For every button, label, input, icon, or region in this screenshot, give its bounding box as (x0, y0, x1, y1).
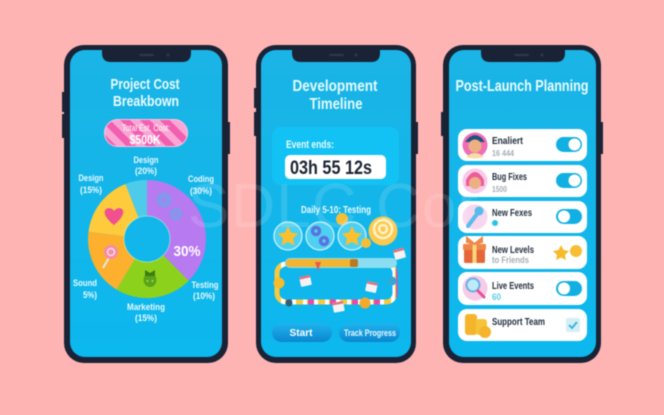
start button (272, 323, 332, 342)
row: new levels: New Levels (492, 245, 534, 256)
icon: gears (157, 193, 182, 220)
heading: development timeline: Development (292, 78, 378, 95)
row: bug fixes: 1500 (492, 185, 507, 194)
row: live events: 60 (492, 292, 501, 302)
heading: development timeline: Timeline (310, 96, 363, 113)
icon: lollipop (103, 245, 118, 268)
phone 3: post-launch planning (441, 45, 603, 363)
heading: project cost breakdown (110, 76, 180, 110)
candy track (274, 258, 397, 308)
chart labels: 5%) (83, 290, 97, 300)
coin top (336, 213, 348, 225)
start button: Start (290, 327, 313, 339)
row: new fexes: New Fexes (492, 208, 532, 219)
chart labels: Sound (73, 278, 97, 288)
chart labels: Marketing (127, 302, 165, 312)
total cost pill: $500K (130, 133, 160, 147)
total cost pill (104, 119, 188, 147)
countdown panel (272, 127, 399, 185)
badge: star 2 (338, 222, 366, 250)
row: new levels: to Friends (492, 255, 529, 265)
chart labels: Design (78, 173, 104, 183)
row: support team: Support Team (492, 317, 545, 328)
watermark: SDLC Cor (188, 172, 478, 241)
calendar icons (299, 248, 406, 313)
donut chart (88, 180, 206, 298)
row: new fexes (458, 201, 587, 233)
heading: project cost breakdown: Breakbown (113, 93, 179, 110)
badges row (274, 213, 398, 250)
chart labels: Coding (188, 174, 214, 184)
chart labels: (10%) (193, 291, 215, 301)
chart labels (73, 155, 218, 323)
icon: bug (144, 270, 156, 287)
row: new levels (458, 236, 587, 269)
phone 1: project cost breakdown (62, 45, 230, 363)
row: live events (458, 272, 587, 305)
candy badge (368, 216, 398, 246)
chart labels: (15%) (80, 185, 102, 195)
chart labels: (15%) (135, 313, 157, 323)
chart labels: (20%) (135, 166, 157, 176)
row: live events: Live Events (492, 281, 534, 292)
badge: star (274, 222, 302, 250)
countdown panel: 03h 55 12s (290, 158, 372, 179)
chart labels: (30%) (190, 186, 212, 196)
row: enaliert (458, 129, 587, 161)
progress pin (315, 262, 321, 271)
track flowers (274, 278, 284, 288)
icon: heart (105, 208, 123, 225)
phone 2 body (254, 45, 418, 363)
badge: gears (306, 222, 334, 250)
phone 1 body (62, 45, 230, 363)
row: support team (458, 309, 587, 341)
coin (361, 238, 371, 248)
heading: development timeline (292, 78, 378, 113)
track progress button (339, 323, 400, 342)
countdown panel: Event ends: (286, 139, 334, 151)
donut value: 30% (174, 243, 200, 260)
phone 3 body (441, 45, 603, 363)
row: bug fixes: Bug Fixes (492, 172, 527, 183)
row: enaliert: Enaliert (492, 136, 524, 147)
track progress button: Track Progress (344, 328, 396, 339)
row: enaliert: 16 444 (492, 149, 514, 158)
daily label: Daily 5-10: Testing (301, 205, 371, 216)
chart labels: Testing (192, 280, 218, 290)
heading: post-launch planning: Post-Launch Planning (456, 78, 588, 95)
heading: project cost breakdown: Project Cost (110, 76, 180, 93)
chart labels: Design (134, 155, 158, 165)
total cost pill: Total Est. Cost: (122, 123, 170, 133)
row: bug fixes (458, 165, 587, 197)
phone 2: development timeline (254, 45, 418, 363)
